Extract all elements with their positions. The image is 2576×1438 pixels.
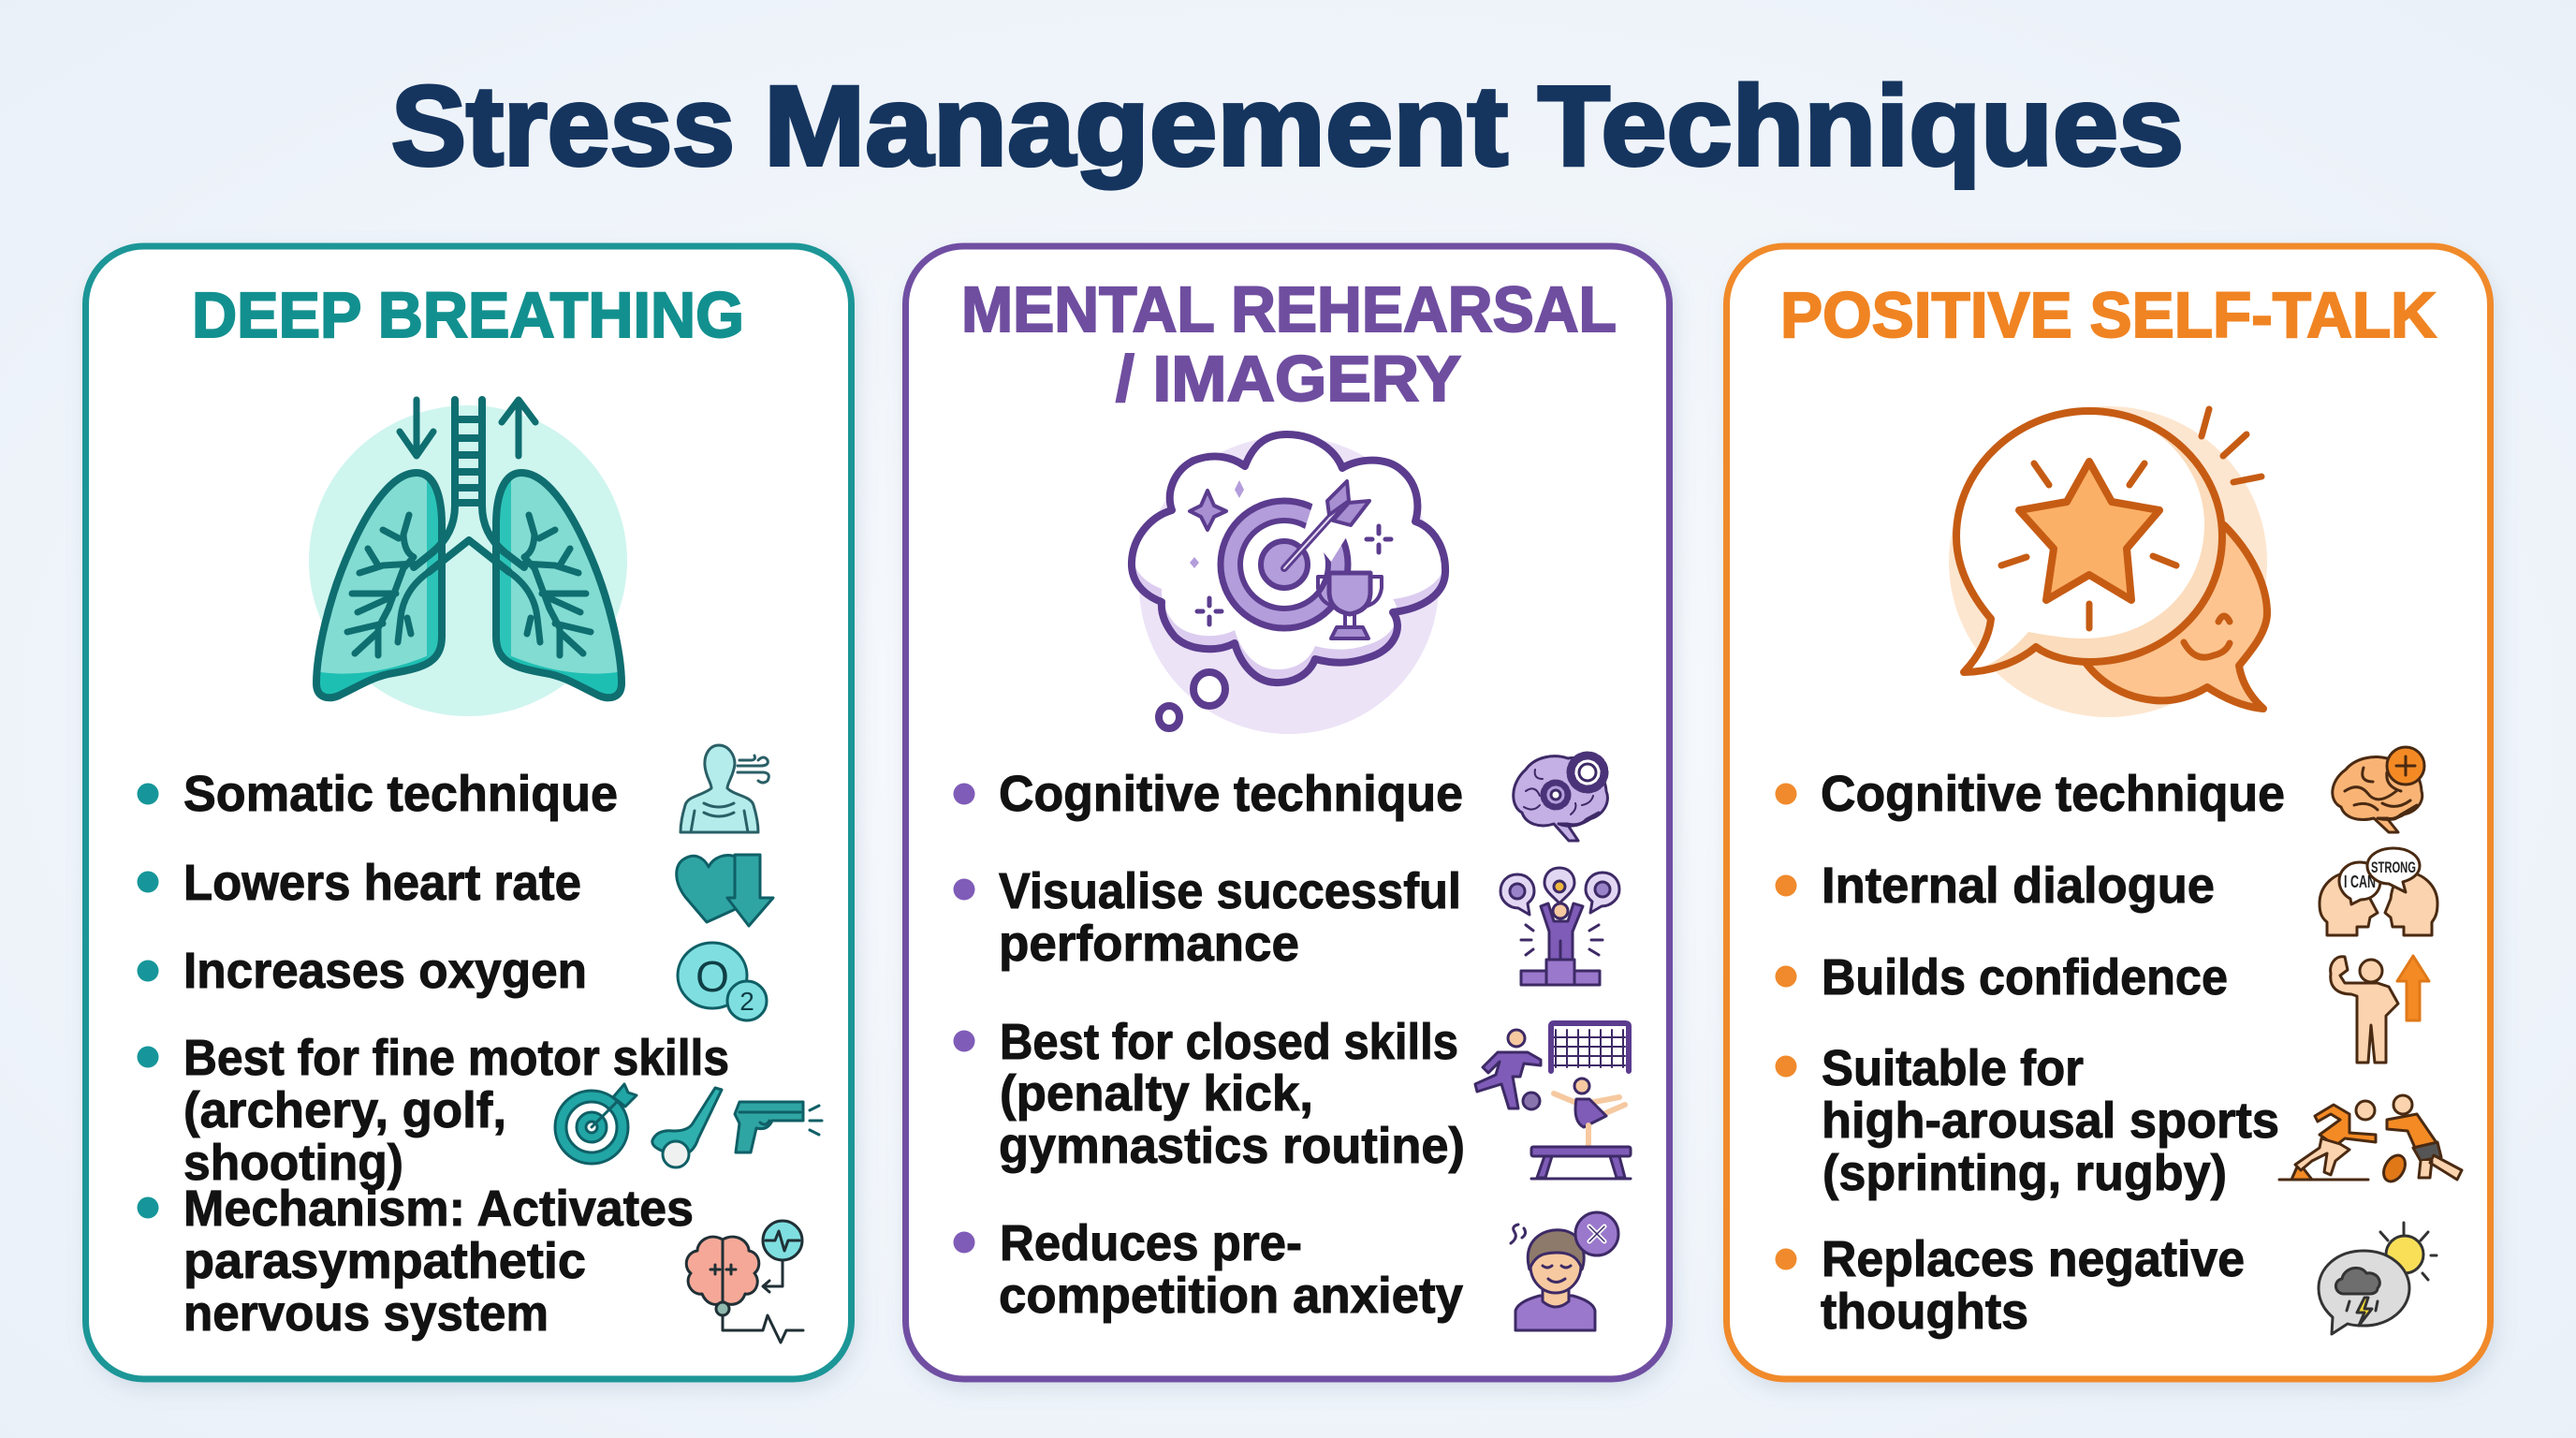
icon: oxygen O2: O	[695, 952, 729, 1001]
icon: breathing torso	[681, 745, 768, 832]
card frame	[86, 246, 852, 1379]
heading: mental rehearsal imagery: MENTAL REHEARSAL	[961, 273, 1617, 345]
heading: positive self-talk: POSITIVE SELF-TALK	[1780, 279, 2437, 351]
bullet list: deep breathing: Increases oxygen	[183, 943, 587, 999]
bullet list: mental rehearsal: competition anxiety	[999, 1268, 1463, 1324]
icon: thought cloud with target	[1132, 421, 1445, 734]
bullet list: positive self-talk	[1775, 766, 2285, 1340]
bullet list: deep breathing: Lowers heart rate	[183, 855, 581, 911]
icon: two heads dialogue: STRONG	[2371, 858, 2416, 876]
bullet list: mental rehearsal: performance	[999, 916, 1299, 972]
bullet list: mental rehearsal: (penalty kick,	[1000, 1065, 1313, 1122]
icon: gymnast on beam	[1531, 1078, 1631, 1179]
bullet list: deep breathing: Mechanism: Activates	[183, 1181, 694, 1237]
bullet list: mental rehearsal	[953, 766, 1465, 1324]
panel: deep breathing	[86, 246, 852, 1379]
title: Management	[764, 62, 1508, 189]
title	[391, 62, 2184, 189]
icon: lungs	[309, 400, 629, 716]
bullet list: deep breathing: nervous system	[183, 1285, 549, 1342]
bullet list: positive self-talk: Builds confidence	[1822, 949, 2228, 1005]
bullet list: positive self-talk: Replaces negative	[1822, 1231, 2245, 1287]
card frame	[1726, 246, 2490, 1379]
bullet list: mental rehearsal: gymnastics routine)	[999, 1118, 1465, 1174]
heading: mental rehearsal imagery: / IMAGERY	[1116, 343, 1461, 415]
icon: oxygen O2: 2	[739, 987, 754, 1016]
title: Techniques	[1538, 62, 2184, 189]
bullet list: positive self-talk: (sprinting, rugby)	[1822, 1145, 2227, 1201]
icon: heart with down arrow	[677, 855, 773, 926]
bullet list: mental rehearsal: Visualise successful	[999, 863, 1461, 919]
bullet list: positive self-talk: high-arousal sports	[1822, 1093, 2279, 1149]
icon: oxygen O2	[678, 943, 767, 1020]
title: Stress	[391, 62, 735, 189]
icon: brain and heart monitor	[686, 1221, 803, 1343]
icon: pistol	[735, 1102, 822, 1152]
panel: positive self-talk	[1726, 246, 2490, 1379]
icon: strong person with arrow	[2331, 956, 2429, 1063]
card frame	[906, 246, 1670, 1379]
icon: sprinter and rugby player	[2279, 1095, 2462, 1185]
icon: brain with gears	[1514, 756, 1607, 841]
heading: deep breathing: DEEP BREATHING	[192, 279, 744, 351]
bullet list: positive self-talk: thoughts	[1821, 1284, 2028, 1340]
icon: storm thought and sun	[2319, 1223, 2437, 1334]
bullet list: positive self-talk: Cognitive technique	[1821, 766, 2285, 822]
bullet list: deep breathing	[137, 766, 729, 1342]
icon: soccer penalty kick	[1475, 1023, 1629, 1109]
bullet list: positive self-talk: Suitable for	[1822, 1040, 2084, 1096]
bullet list: deep breathing: Best for fine motor skills	[183, 1030, 729, 1086]
bullet list: positive self-talk: Internal dialogue	[1822, 858, 2215, 914]
bullet list: deep breathing: shooting)	[183, 1135, 403, 1191]
icon: two heads dialogue: I CAN	[2344, 873, 2376, 891]
panel: mental rehearsal	[906, 246, 1670, 1379]
bullet list: mental rehearsal: Cognitive technique	[999, 766, 1463, 822]
icon: archery target	[555, 1084, 637, 1164]
icon: speech bubbles with star	[1949, 406, 2267, 717]
bullet list: deep breathing: parasympathetic	[183, 1233, 586, 1289]
icon: podium success	[1500, 868, 1619, 985]
icon: brain with plus	[2333, 747, 2424, 832]
bullet list: mental rehearsal: Reduces pre-	[1000, 1215, 1302, 1271]
bullet list: deep breathing: (archery, golf,	[183, 1082, 506, 1138]
heading: mental rehearsal imagery	[961, 273, 1617, 415]
icon: golf club	[652, 1088, 722, 1167]
icon: two heads dialogue	[2320, 848, 2437, 935]
bullet list: mental rehearsal: Best for closed skills	[1000, 1014, 1458, 1070]
icon: calm person with cross	[1511, 1212, 1618, 1330]
bullet list: deep breathing: Somatic technique	[183, 766, 618, 822]
